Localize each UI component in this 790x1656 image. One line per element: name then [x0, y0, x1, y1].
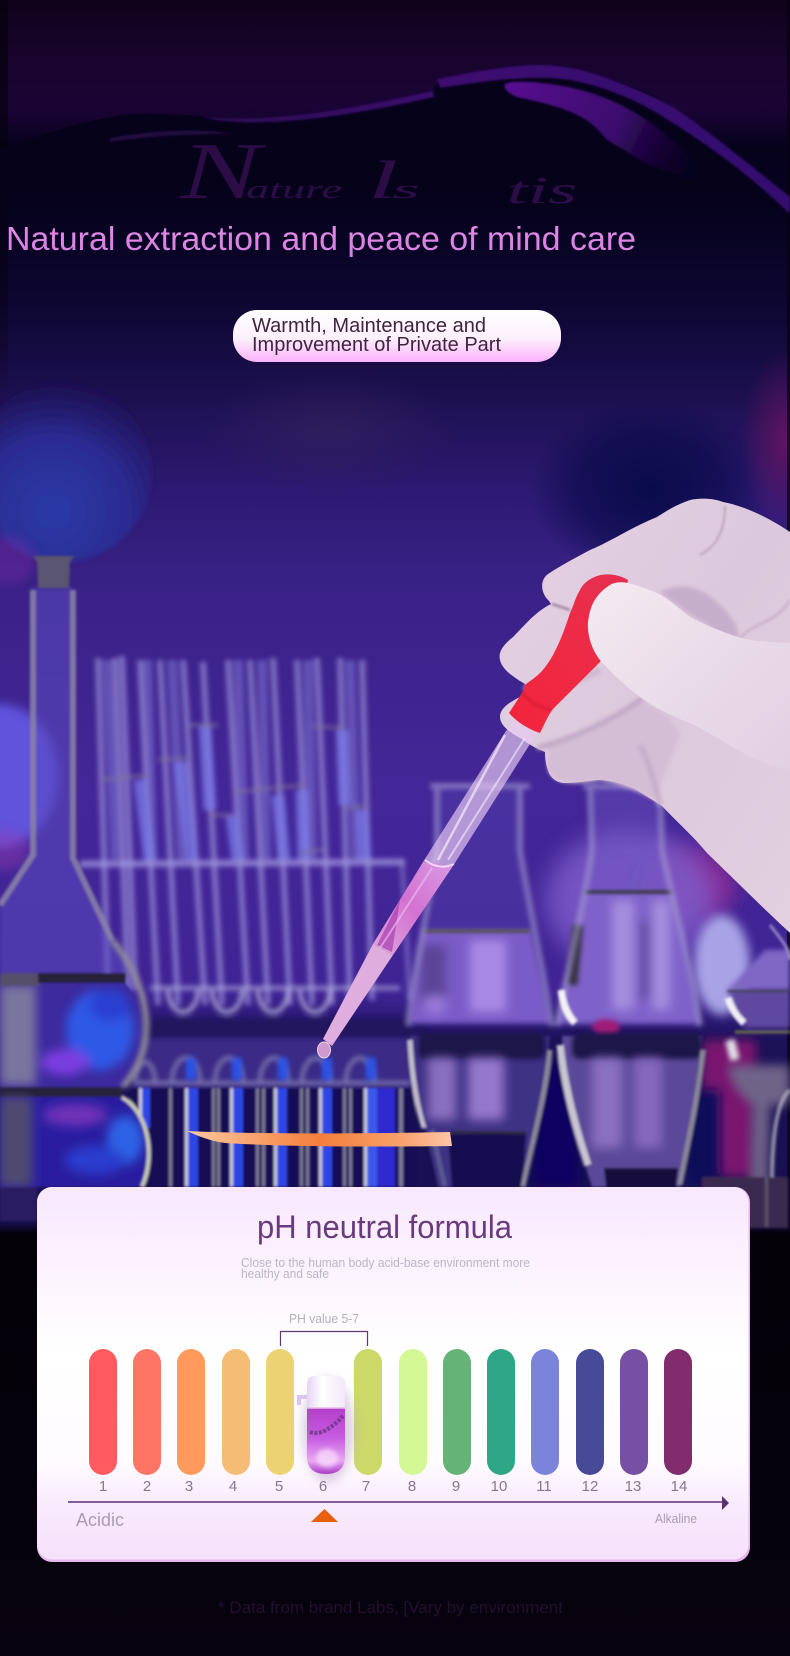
coloured backdrop behind right flasks	[533, 830, 756, 1187]
acidic label: Acidic	[76, 1510, 124, 1530]
pH scale numbers: 1	[99, 1478, 107, 1495]
table and reflected tubes	[130, 1038, 420, 1187]
pipette	[318, 720, 537, 1058]
pH scale numbers: 9	[452, 1478, 460, 1495]
panel: pH neutral formula	[37, 1187, 750, 1562]
faint script watermark	[179, 128, 577, 216]
pH scale numbers: 10	[491, 1478, 507, 1495]
pill text: Warmth, Maintenance and	[252, 315, 486, 337]
pH range label: PH value 5-7	[289, 1312, 359, 1326]
pH scale numbers: 13	[625, 1478, 641, 1495]
hand in glove	[500, 499, 790, 933]
scale arrow	[68, 1496, 729, 1510]
pH scale numbers: 8	[408, 1478, 416, 1495]
footnote: * Data from brand Labs, [Vary by environment	[218, 1598, 563, 1617]
left volumetric flask	[0, 556, 150, 1221]
rubber bulb	[509, 574, 628, 733]
pH scale numbers: 12	[582, 1478, 598, 1495]
blurred glassware group	[0, 556, 790, 1228]
faint script watermark: tis	[507, 170, 577, 212]
pH range bracket	[280, 1332, 368, 1346]
panel description	[241, 1256, 530, 1281]
headline: Natural extraction and peace of mind care	[6, 220, 636, 257]
pH scale numbers: 11	[536, 1478, 552, 1495]
pill text: Improvement of Private Part	[252, 334, 501, 356]
pH scale numbers: 14	[671, 1478, 687, 1495]
faint script watermark: ature	[246, 175, 342, 204]
pH scale numbers: 2	[143, 1478, 151, 1495]
alkaline label: Alkaline	[655, 1512, 697, 1526]
pH scale numbers: 3	[185, 1478, 193, 1495]
pH scale numbers	[99, 1478, 687, 1495]
middle conical flask	[408, 786, 552, 1187]
faint script watermark: l	[368, 150, 398, 210]
subheading pill	[233, 310, 561, 362]
drop at tip	[318, 1042, 330, 1058]
pH scale numbers: 5	[275, 1478, 283, 1495]
pH scale numbers: 7	[362, 1478, 370, 1495]
test tube rack	[80, 656, 425, 1038]
marker triangle at pH 6	[311, 1509, 338, 1522]
pH scale numbers: 4	[229, 1478, 237, 1495]
test strip	[187, 1131, 452, 1147]
far right flask	[702, 925, 790, 1228]
right conical flask	[557, 786, 703, 1187]
panel description: healthy and safe	[241, 1267, 329, 1281]
pill text	[252, 315, 501, 356]
bokeh lights	[0, 382, 152, 870]
panel heading: pH neutral formula	[257, 1209, 512, 1245]
faint script watermark: s	[392, 175, 420, 204]
top decorative wave	[0, 65, 790, 270]
thumb	[588, 582, 790, 770]
pH scale numbers: 6	[319, 1478, 327, 1495]
icon: product vial	[297, 1376, 354, 1482]
panel description: Close to the human body acid-base environment more	[241, 1256, 530, 1270]
faint script watermark: N	[179, 128, 267, 216]
pH colour scale bars	[89, 1349, 692, 1475]
